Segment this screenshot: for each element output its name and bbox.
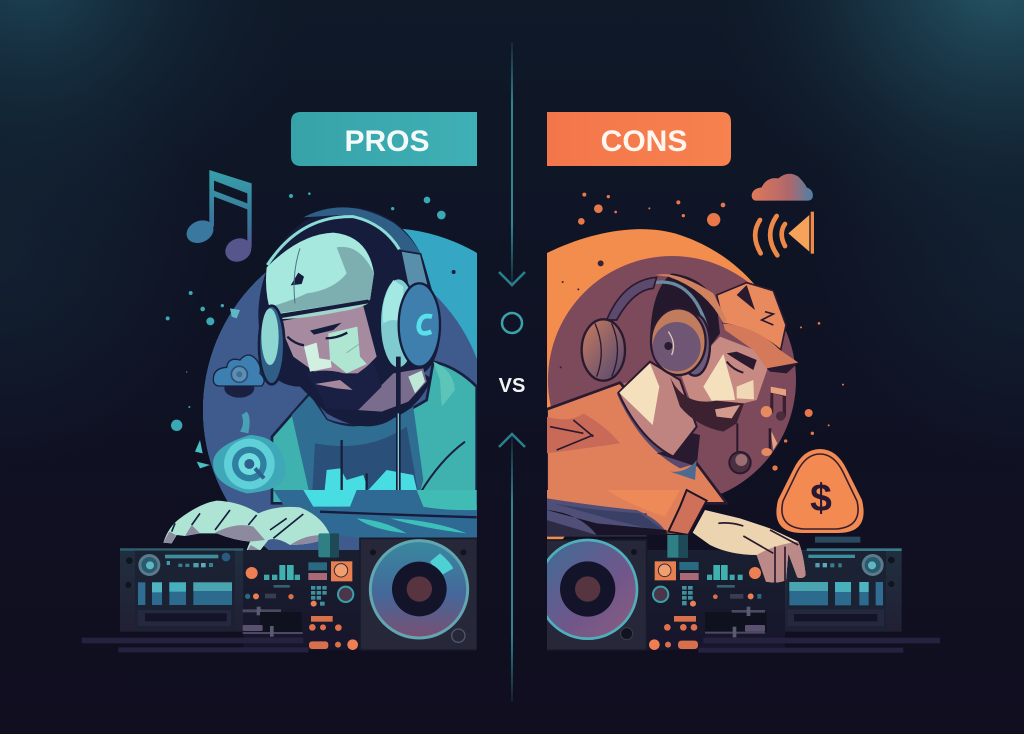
hoodie [272,362,477,503]
backdrop circle [547,229,796,560]
VS label: VS [499,375,525,397]
cap [717,283,798,373]
heading: CONS: CONS [601,125,687,158]
neck [357,368,427,412]
icon: dollar badge: $ [810,477,832,520]
beard [314,366,382,410]
backdrop circle [203,228,477,550]
panel: right mixer unit [785,537,902,632]
arm and sleeve [547,490,707,537]
particles [560,193,844,471]
headphones [582,273,727,381]
central divider with VS [499,42,525,702]
icon: dollar badge [776,449,864,533]
panel: left mixer unit [120,548,243,632]
bottom desk bars [82,638,308,652]
icon: speaker [755,212,814,255]
face [670,337,772,432]
ring [502,313,522,333]
icon: notes [761,387,786,456]
panel: center mixer controls [243,533,360,650]
heading: CONS [547,112,731,166]
bottom desk bars [698,638,940,653]
particles [166,192,456,431]
panel: pros illustration [82,170,477,652]
heading: PROS [291,112,477,166]
icon: spinning target [195,412,286,493]
arrow: down [499,272,525,285]
cable and jack [729,423,751,473]
arm and sleeve [273,490,477,538]
beard [670,377,744,432]
headphones [259,207,440,503]
turntable platter [538,540,647,650]
icon: music note [186,170,252,262]
panel: cons illustration [538,174,940,653]
hands [163,500,330,550]
panel: center mixer controls [647,535,785,650]
hoodie [547,382,727,503]
head silhouette [258,207,441,426]
heading: PROS: PROS [344,125,430,158]
face [278,306,382,410]
hand [693,510,806,583]
neck [618,362,697,457]
cap [266,233,374,319]
icon: cloud [213,355,264,398]
icon: cloud [752,174,813,201]
arrow: up [499,434,525,447]
turntable platter [360,538,477,650]
